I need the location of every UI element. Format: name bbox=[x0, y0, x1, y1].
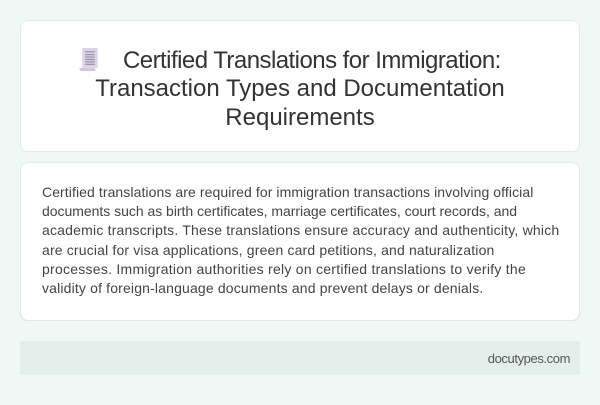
title panel bbox=[20, 20, 580, 152]
title: Requirements bbox=[225, 104, 375, 131]
description text: documents such as birth certificates, marriage certificates, court records, and bbox=[42, 203, 517, 219]
description text: Certified translations are required for immigration transactions involving official bbox=[42, 184, 533, 200]
footer bar bbox=[20, 341, 580, 375]
description text: academic transcripts. These translations ensure accuracy and authenticity, which bbox=[42, 222, 559, 238]
title: Certified Translations for Immigration: bbox=[123, 47, 501, 74]
description text: validity of foreign-language documents and prevent delays or denials. bbox=[42, 280, 483, 296]
footer source label: docutypes.com bbox=[488, 351, 570, 366]
description text bbox=[42, 184, 559, 296]
description panel bbox=[20, 162, 580, 321]
description text: processes. Immigration authorities rely on certified translations to verify the bbox=[42, 261, 526, 277]
title bbox=[95, 47, 505, 131]
icon: document scroll bbox=[80, 48, 98, 71]
title: Transaction Types and Documentation bbox=[95, 75, 505, 102]
description text: are crucial for visa applications, green card petitions, and naturalization bbox=[42, 242, 494, 258]
